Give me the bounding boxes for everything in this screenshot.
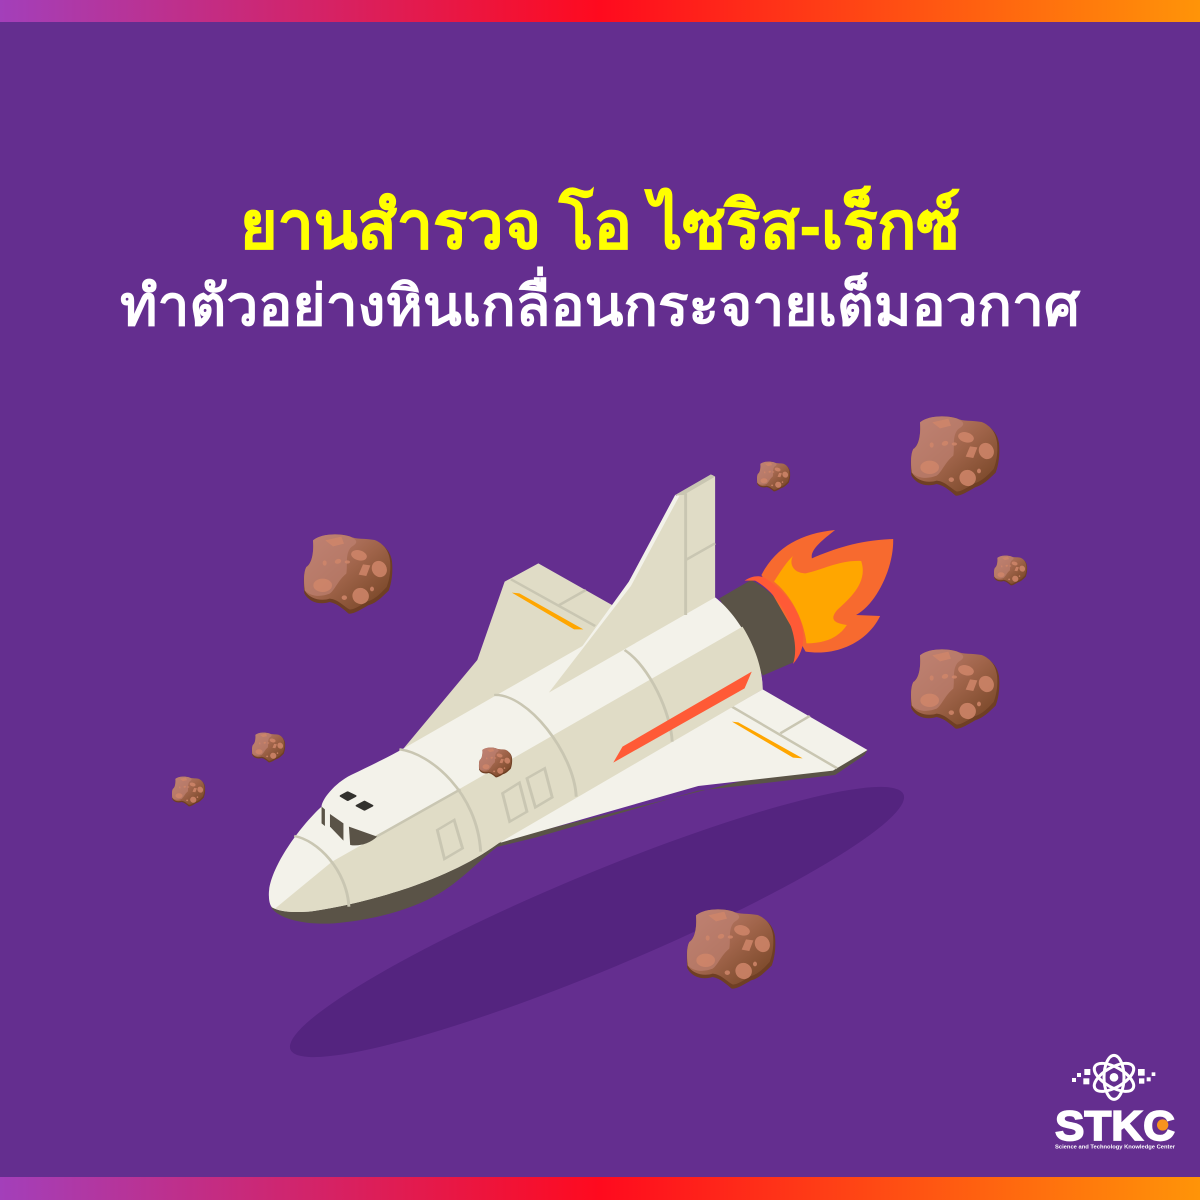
near wing (496, 689, 867, 847)
fuselage underside (271, 833, 503, 924)
cockpit windows (322, 807, 377, 845)
top gradient bar (0, 0, 1200, 22)
logo orange dot (1157, 1119, 1168, 1131)
subtitle: ทำตัวอย่างหินเกลื่อนกระจายเต็มอวกาศ (120, 266, 1081, 337)
asteroid (252, 733, 285, 762)
asteroid (757, 462, 790, 491)
logo pixels (1072, 1069, 1155, 1084)
asteroids (172, 416, 1027, 989)
logo tagline: Science and Technology Knowledge Center (1055, 1144, 1175, 1150)
logo wordmark: STKC (1055, 1102, 1175, 1149)
engine ring (745, 576, 803, 664)
engine flame (761, 530, 893, 653)
roof windows (341, 792, 372, 810)
STKC logo (1055, 1055, 1175, 1150)
title: ยานสำรวจ โอ ไซริส-เร็กซ์ (240, 185, 960, 262)
asteroid (304, 534, 392, 614)
bottom gradient bar (0, 1177, 1200, 1200)
asteroid (479, 748, 512, 777)
tail fin (549, 474, 715, 693)
asteroid (994, 556, 1027, 585)
engine nozzle (719, 580, 796, 676)
asteroid (172, 777, 205, 806)
spaceship shadow (272, 750, 922, 1094)
asteroid (911, 649, 999, 729)
red stripe (613, 672, 752, 763)
asteroid (687, 909, 775, 989)
far wing (404, 563, 612, 748)
spaceship (269, 474, 893, 924)
fuselage (269, 597, 763, 912)
asteroid (911, 416, 999, 496)
logo atom icon (1090, 1055, 1138, 1099)
